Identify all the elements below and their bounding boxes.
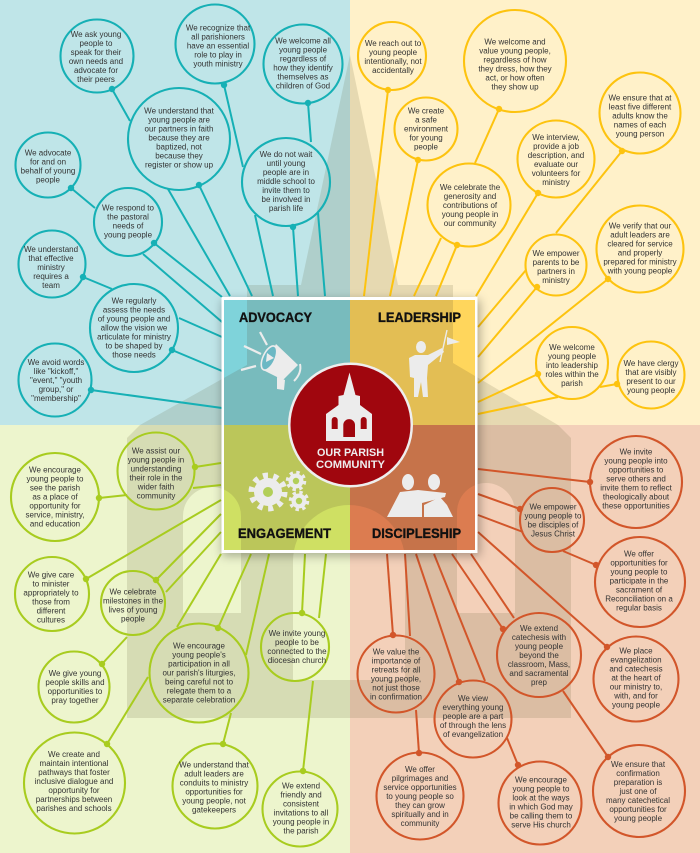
label: community: COMMUNITY [316, 459, 386, 471]
heading: engagement: ENGAGEMENT [238, 525, 331, 541]
bubble: clergy visibly present: We have clergy [624, 359, 678, 368]
bubble: leadership roles [535, 327, 608, 399]
bubble: wider faith community: young people in [128, 455, 184, 464]
bubble: welcome all young people: We welcome all [275, 37, 331, 46]
bubble: five different adults: least five different [609, 102, 672, 111]
bubble: partners in faith: because they [155, 152, 203, 161]
bubble: pastoral needs: We respond to [102, 203, 154, 212]
bubble: God calling them: young people to [513, 785, 570, 794]
bubble: leadership roles: into leadership [546, 361, 599, 370]
bubble: adult leaders as conduits: We understand that [179, 761, 250, 770]
bubble: safe environment: a safe [415, 116, 437, 125]
bubble: diocesan church: diocesan church [268, 656, 326, 665]
bubble: wider faith community: community [137, 491, 175, 500]
bubble: God calling them: serve His church [511, 821, 571, 830]
bubble: value retreats: young people, [371, 674, 421, 683]
bubble: lens of evangelization: people are a part [443, 712, 504, 721]
bubble: empower parents: We empower [533, 249, 580, 258]
bubble: extend catechesis: young people [515, 642, 564, 651]
bubble: friendly invitations: consistent [283, 800, 320, 809]
bubble: different cultures: different [37, 607, 66, 616]
bubble: verify adult leaders: with young people [607, 266, 673, 275]
bubble: confirmation preparation [593, 745, 685, 837]
bubble: welcome and value [464, 10, 566, 112]
bubble: God calling them: look at the ways [512, 794, 570, 803]
bubble: friendly invitations: friendly and [280, 791, 322, 800]
bubble: all parishioners have a role: youth ministry [193, 59, 243, 68]
bubble: ministry requires a team: that effective [28, 254, 74, 263]
bubble: advocate for young people: We advocate [25, 148, 72, 157]
bubble: avoid words like kickoff [18, 344, 94, 416]
bubble: disciples of Jesus Christ: young people to [525, 511, 582, 520]
bubble: different cultures: those from [32, 598, 70, 607]
bubble: empower parents [526, 234, 586, 296]
bubble: pilgrimages and service: they can grow [395, 801, 445, 810]
bubble: regularly assess needs: those needs [112, 351, 156, 360]
bubble: partners in faith: because they are [148, 134, 210, 143]
panel: leadership statements [358, 10, 684, 414]
bubble: pilgrimages and service: community [401, 819, 439, 828]
bubble: intentional pathways: opportunity for [48, 786, 100, 795]
bubble: safe environment: environment [404, 125, 449, 134]
bubble: five different adults: adults know the [612, 111, 668, 120]
bubble: value retreats: in confirmation [370, 692, 422, 701]
bubble: serve others and reflect: theologically about [603, 492, 670, 501]
bubble: participation in liturgies: our parish's liturgies, [162, 668, 236, 677]
bubble: ask young people to speak: people to [80, 39, 113, 48]
bubble: partners in faith: young people are [148, 116, 210, 125]
bubble: lens of evangelization: of evangelization [443, 730, 503, 739]
bubble: wider faith community: We assist our [132, 446, 180, 455]
advocacy connector lines [71, 85, 325, 408]
bubble: serve others and reflect: We invite [620, 447, 653, 456]
bubble: ministry requires a team: We understand [24, 245, 78, 254]
bubble: verify adult leaders: prepared for ministry [603, 257, 677, 266]
bubble: skills to pray: opportunities to [48, 687, 103, 696]
bubble: confirmation preparation: young people [614, 814, 663, 823]
bubble: friendly invitations: the parish [283, 827, 319, 836]
bubble: welcome and value: they show up [491, 82, 539, 91]
bubble: serve others and reflect: opportunities to [609, 465, 664, 474]
bubble: celebrate milestones: lives of young [109, 605, 157, 614]
bubble: clergy visibly present: young people [627, 386, 676, 395]
bubble: extend catechesis: and sacramental [509, 669, 569, 678]
bubble: participation in liturgies: being careful not to [165, 677, 234, 686]
bubble: parish as place of opportunity: and education [30, 520, 80, 529]
bubble: celebrate generosity: We celebrate the [440, 183, 501, 192]
bubble: advocate for young people [16, 132, 80, 198]
bubble: ministry requires a team [18, 230, 86, 298]
bubble: parish as place of opportunity: young people to [27, 475, 84, 484]
heading: advocacy: ADVOCACY [239, 309, 313, 325]
bubble: all parishioners have a role: We recognize that [186, 23, 251, 32]
bubble: adult leaders as conduits: adult leaders are [184, 770, 244, 779]
bubble: pastoral needs: needs of [113, 221, 144, 230]
bubble: disciples of Jesus Christ [517, 488, 584, 552]
bubble: diocesan church: connected to the [267, 647, 327, 656]
bubble: intentional pathways: maintain intentional [40, 759, 109, 768]
church silhouette watermark [127, 55, 571, 718]
bubble: partners in faith: our partners in faith [145, 125, 213, 134]
bubble: diocesan church: people to be [275, 638, 320, 647]
bubble: friendly invitations: young people in [273, 818, 329, 827]
bubble: wider faith community [118, 432, 198, 510]
bubble: ask young people to speak: advocate for [74, 66, 118, 75]
bubble: celebrate generosity: generosity and [444, 192, 496, 201]
bubble: skills to pray: pray together [51, 696, 99, 705]
bubble: serve others and reflect [587, 436, 682, 528]
bubble: do not wait until middle school: invite them to [262, 186, 310, 195]
bubble: sacrament of Reconciliation: We offer [624, 550, 654, 559]
bubble: reach out intentionally: intentionally, not [364, 57, 422, 66]
bubble: avoid words like kickoff: "event," "youth [30, 376, 82, 385]
bubble: extend catechesis: classroom, Mass, [508, 660, 570, 669]
bubble: confirmation preparation: just one of [619, 787, 657, 796]
bubble: adult leaders as conduits: conduits to ministry [180, 779, 248, 788]
bubble: intentional pathways: partnerships between [36, 795, 112, 804]
bubble: pastoral needs: young people [104, 230, 153, 239]
leadership connector lines [364, 90, 622, 414]
bubble: intentional pathways: We create and [48, 750, 100, 759]
bubble: welcome and value: We welcome and [484, 37, 546, 46]
bubble: evangelization and catechesis: at the heart of [611, 673, 661, 682]
bubble: ask young people to speak: own needs and [69, 57, 123, 66]
bubble: all parishioners have a role: role to play in [194, 50, 242, 59]
bubble: confirmation preparation: opportunities for [609, 805, 667, 814]
bubble: sacrament of Reconciliation: opportunities for [610, 559, 668, 568]
bubble: regularly assess needs: to be shaped by [106, 342, 162, 351]
bubble: serve others and reflect: young people into [604, 456, 668, 465]
bubble: God calling them: be calling them to [510, 812, 573, 821]
label: our parish: OUR PARISH [317, 447, 384, 459]
bubble: parish as place of opportunity: as a place of [32, 493, 78, 502]
bubble: evangelization and catechesis: our ministry to, [610, 682, 662, 691]
bubble: partners in faith [128, 88, 230, 190]
bubble: pilgrimages and service: We offer [405, 765, 435, 774]
bubble: evangelization and catechesis: with, and for [613, 691, 658, 700]
bubble: welcome all young people: young people [279, 46, 328, 55]
bubble: confirmation preparation: preparation is [614, 778, 662, 787]
bubble: different cultures [15, 557, 89, 631]
bubble: pilgrimages and service: spiritually and in [391, 810, 449, 819]
bubble: welcome all young people: how they identify [273, 64, 333, 73]
bubble: God calling them: in which God may [509, 803, 573, 812]
bubble: adult leaders as conduits: opportunities for [185, 788, 243, 797]
bubble: evangelization and catechesis: young people [612, 700, 661, 709]
panel: engagement statements [11, 432, 338, 846]
bubble: celebrate generosity: young people in [442, 210, 498, 219]
bubble: empower parents: parents to be [533, 258, 580, 267]
bubble: value retreats: importance of [372, 656, 421, 665]
bubble: safe environment: We create [408, 107, 445, 116]
heading: leadership: LEADERSHIP [378, 309, 461, 325]
bubble: sacrament of Reconciliation: participate in the [610, 577, 669, 586]
bubble: regularly assess needs: assess the needs [103, 306, 165, 315]
bubble: regularly assess needs: of young people and [98, 315, 170, 324]
bubble: welcome all young people [264, 24, 342, 106]
bubble: regularly assess needs: allow the vision we [101, 324, 168, 333]
bubble: leadership roles: roles within the [545, 370, 599, 379]
bubble: welcome all young people: children of God [276, 82, 330, 91]
bubble: five different adults: We ensure that at [608, 93, 672, 102]
bubble: participation in liturgies: participation in all [168, 659, 230, 668]
bubble: confirmation preparation: many catechetical [606, 796, 670, 805]
bubble: confirmation preparation: confirmation [616, 769, 660, 778]
bubble: regularly assess needs: articulate for ministry [97, 333, 171, 342]
bubble: value retreats [358, 632, 434, 712]
bubble: celebrate milestones: milestones in the [103, 596, 164, 605]
bubble: different cultures: to minister [33, 580, 70, 589]
bubble: serve others and reflect: invite them to reflect [600, 483, 673, 492]
bubble: extend catechesis: catechesis with [512, 633, 566, 642]
bubble: reach out intentionally: young people [369, 48, 418, 57]
panel: advocacy statements [16, 4, 342, 416]
bubble: sacrament of Reconciliation [593, 537, 685, 627]
bubble: value retreats: retreats for all [372, 665, 421, 674]
bubble: interview volunteers [518, 120, 594, 198]
bubble: celebrate milestones [101, 571, 165, 635]
icon: two people [387, 474, 453, 517]
bubble: participation in liturgies: separate celebration [163, 695, 235, 704]
bubble: celebrate generosity: contributions of [443, 201, 498, 210]
bubble: diocesan church [261, 610, 329, 681]
bubble: participation in liturgies [150, 624, 248, 722]
bubble: all parishioners have a role: have an essential [187, 41, 249, 50]
bubble: extend catechesis [497, 613, 581, 697]
bubble: intentional pathways: inclusive dialogue and [35, 777, 113, 786]
bubble: skills to pray: people skills and [45, 678, 105, 687]
bubble: extend catechesis: prep [531, 678, 548, 687]
bubble: interview volunteers: evaluate our [534, 160, 578, 169]
bubble: different cultures: cultures [37, 616, 65, 625]
bubble: lens of evangelization: everything young [443, 703, 503, 712]
bubble: interview volunteers: provide a job [533, 142, 579, 151]
bubble: advocate for young people: for and on [30, 157, 66, 166]
bubble: regularly assess needs [90, 284, 178, 372]
bubble: welcome and value: they dress, how they [478, 64, 552, 73]
bubble: celebrate generosity [428, 164, 510, 248]
bubble: different cultures: appropriately to [23, 589, 79, 598]
bubble: parish as place of opportunity [11, 453, 102, 541]
bubble: five different adults: young person [616, 129, 664, 138]
central square shadow [222, 300, 480, 556]
bubble: skills to pray [38, 652, 110, 722]
bubble: adult leaders as conduits: gatekeepers [192, 806, 236, 815]
bubble: pastoral needs [94, 188, 162, 256]
bubble: ask young people to speak: their peers [77, 75, 115, 84]
bubble: advocate for young people: people [36, 175, 61, 184]
bubble: skills to pray: We give young [49, 669, 101, 678]
bubble: interview volunteers: description, and [528, 151, 584, 160]
bubble: welcome and value: act, or how often [485, 73, 545, 82]
bubble: ask young people to speak: speak for their [71, 48, 122, 57]
bubble: welcome and value: regardless of how [483, 55, 547, 64]
bubble: pilgrimages and service: service opportunities [383, 783, 457, 792]
bubble: ask young people to speak [60, 20, 134, 92]
bubble: different cultures: We give care [28, 571, 75, 580]
bubble: value retreats: not just those [372, 683, 420, 692]
heading: discipleship: DISCIPLESHIP [372, 525, 461, 541]
bubble: sacrament of Reconciliation: regular basis [616, 604, 662, 613]
bubble: all parishioners have a role: all parishioners [191, 32, 245, 41]
bubble: friendly invitations: We extend [282, 782, 320, 791]
bubble: ministry requires a team: ministry [37, 263, 65, 272]
bubble: God calling them [498, 762, 582, 844]
bubble: evangelization and catechesis: and catechesis [609, 664, 663, 673]
bubble: interview volunteers: ministry [542, 178, 570, 187]
discipleship connector lines [387, 469, 608, 765]
bubble: extend catechesis: We extend [520, 624, 558, 633]
bubble: welcome all young people: themselves as [277, 73, 329, 82]
bubble: do not wait until middle school: parish life [269, 204, 304, 213]
bubble: do not wait until middle school: We do not wait [260, 150, 313, 159]
bubble: pilgrimages and service [376, 750, 464, 840]
bubble: disciples of Jesus Christ: We empower [530, 502, 577, 511]
bubble: disciples of Jesus Christ: Jesus Christ [531, 529, 576, 538]
bubble: interview volunteers: volunteers for [532, 169, 581, 178]
bubble: reach out intentionally: accidentally [372, 66, 414, 75]
bubble: sacrament of Reconciliation: sacrament of [616, 586, 663, 595]
bubble: reach out intentionally [358, 22, 426, 93]
bubble: celebrate generosity: our community [444, 219, 496, 228]
bubble: diocesan church: We invite young [269, 629, 325, 638]
bubble: all parishioners have a role [176, 4, 254, 88]
bubble: regularly assess needs: We regularly [112, 297, 156, 306]
bubble: interview volunteers: We interview, [532, 133, 580, 142]
bubble: wider faith community: their role in the [130, 473, 183, 482]
bubble: parish as place of opportunity: We encourage [29, 466, 81, 475]
bubble: confirmation preparation: We ensure that [611, 760, 666, 769]
bubble: do not wait until middle school: be involved in [262, 195, 310, 204]
bubble: five different adults: names of each [614, 120, 666, 129]
bubble: celebrate milestones: people [121, 614, 146, 623]
bubble: advocate for young people: behalf of young [21, 166, 75, 175]
bubble: intentional pathways: pathways that foster [38, 768, 110, 777]
bubble: serve others and reflect: these opportunities [602, 501, 670, 510]
bubble: lens of evangelization: of through the lens [440, 721, 506, 730]
bubble: verify adult leaders: adult leaders are [610, 230, 670, 239]
bubble: intentional pathways [24, 732, 125, 834]
bubble: verify adult leaders: We verify that our [609, 221, 672, 230]
bubble: do not wait until middle school: middle school to [257, 177, 315, 186]
bubble: verify adult leaders: cleared for service [607, 239, 673, 248]
bubble: extend catechesis: beyond the [519, 651, 559, 660]
bubble: parish as place of opportunity: see the parish [30, 484, 80, 493]
bubble: adult leaders as conduits [172, 741, 258, 828]
bubble: reach out intentionally: We reach out to [365, 39, 422, 48]
engagement connector lines [86, 463, 326, 771]
bubble: lens of evangelization: We view [458, 694, 488, 703]
bubble: ministry requires a team: requires a [33, 272, 69, 281]
bubble: safe environment [394, 98, 458, 163]
bubble: leadership roles: We welcome [549, 343, 595, 352]
bubble: leadership roles: parish [561, 379, 583, 388]
bubble: participation in liturgies: young people's [172, 650, 226, 659]
bubble: parish as place of opportunity: service, ministry, [26, 511, 84, 520]
bubble: empower parents: ministry [542, 276, 570, 285]
bubble: leadership roles: young people [548, 352, 597, 361]
bubble: sacrament of Reconciliation: young people to [611, 568, 668, 577]
bubble: empower parents: partners in [537, 267, 575, 276]
bubble: do not wait until middle school: people are in [263, 168, 309, 177]
bubble: ministry requires a team: team [42, 281, 60, 290]
bubble: partners in faith: baptized, not [156, 143, 203, 152]
bubble: avoid words like kickoff: group," or [39, 385, 74, 394]
bubble: welcome and value: value young people, [479, 46, 551, 55]
bubble: friendly invitations: invitations to all [274, 809, 329, 818]
bubble: safe environment: for young [409, 134, 443, 143]
bubble: value retreats: We value the [373, 647, 420, 656]
bubble: clergy visibly present [614, 342, 684, 408]
bubble: avoid words like kickoff: like "kickoff," [34, 367, 78, 376]
bubble: parish as place of opportunity: opportunity for [29, 502, 81, 511]
bubble: participation in liturgies: relegate them to a [167, 686, 232, 695]
bubble: safe environment: people [414, 143, 439, 152]
bubble: five different adults [600, 72, 680, 154]
bubble: pastoral needs: the pastoral [107, 212, 149, 221]
icon: leader with flag [409, 330, 460, 397]
bubble: wider faith community: understanding [131, 464, 181, 473]
bubble: pilgrimages and service: pilgrimages and [392, 774, 448, 783]
bubble: verify adult leaders: and properly [618, 248, 662, 257]
bubble: friendly invitations [262, 768, 338, 846]
bubble: adult leaders as conduits: young people, not [182, 797, 247, 806]
bubble: welcome all young people: regardless of [280, 55, 327, 64]
icon: church [326, 372, 372, 441]
bubble: clergy visibly present: present to our [626, 377, 676, 386]
bubble: pilgrimages and service: to young people so [386, 792, 454, 801]
bubble: lens of evangelization [434, 679, 512, 758]
bubble: wider faith community: wider faith [137, 482, 174, 491]
bubble: participation in liturgies: We encourage [173, 641, 225, 650]
bubble: verify adult leaders [596, 206, 684, 292]
centre badge: our parish community [288, 362, 413, 488]
bubble: avoid words like kickoff: We avoid words [28, 358, 84, 367]
bubble: evangelization and catechesis: We place [619, 646, 653, 655]
panel: discipleship statements [358, 436, 685, 844]
bubble: avoid words like kickoff: "membership" [31, 394, 81, 403]
bubble: serve others and reflect: serve others and [606, 474, 666, 483]
bubble: disciples of Jesus Christ: be disciples of [528, 520, 579, 529]
bubble: do not wait until middle school: until young [267, 159, 305, 168]
bubble: intentional pathways: parishes and schools [36, 804, 112, 813]
icon: gears [252, 472, 308, 510]
bubble: sacrament of Reconciliation: Reconciliation on a [605, 595, 673, 604]
bubble: evangelization and catechesis [594, 636, 678, 722]
bubble: evangelization and catechesis: evangelization [610, 655, 662, 664]
bubble: ask young people to speak: We ask young [71, 30, 121, 39]
bubble: partners in faith: register or show up [145, 161, 214, 170]
central square panel [222, 297, 478, 553]
bubble: God calling them: We encourage [515, 776, 567, 785]
bubble: clergy visibly present: that are visibly [625, 368, 677, 377]
bubble: celebrate milestones: We celebrate [110, 587, 157, 596]
bubble: partners in faith: We understand that [144, 107, 215, 116]
icon: megaphone [241, 332, 300, 390]
bubble: do not wait until middle school [242, 138, 330, 230]
